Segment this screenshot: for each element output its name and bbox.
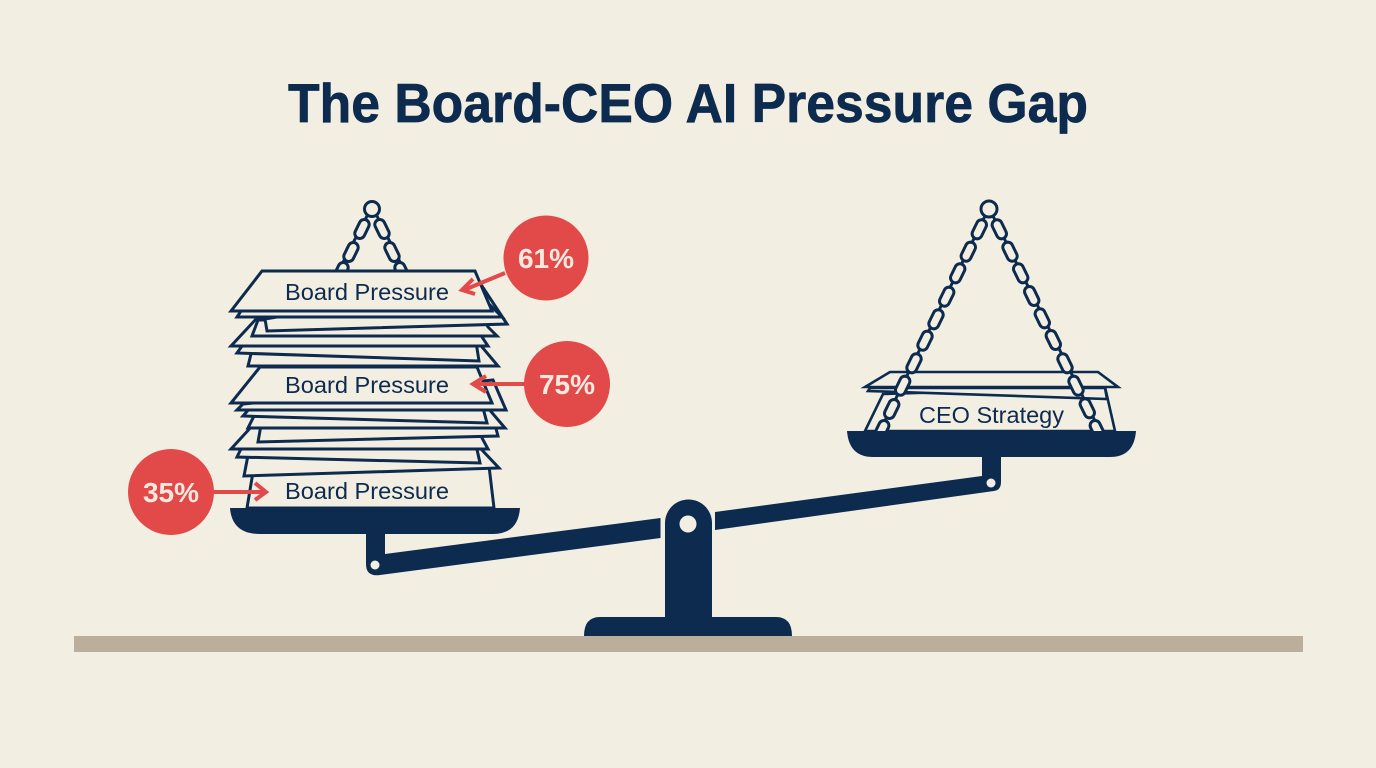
callout: 35% [128, 449, 266, 535]
callout: 75% [473, 341, 610, 427]
fulcrum stand [584, 499, 792, 636]
callout: 75%: 75% [539, 369, 595, 400]
callout: 61%: 61% [518, 243, 574, 274]
label: board pressure middle: Board Pressure [285, 372, 449, 398]
left pan chains [332, 202, 411, 283]
callout: 61% [462, 216, 588, 300]
left pan [230, 508, 520, 534]
callout: 35%: 35% [143, 477, 199, 508]
label: board pressure top: Board Pressure [285, 279, 449, 305]
right pan paper stack [865, 372, 1118, 431]
right pan [847, 431, 1136, 457]
title: The Board-CEO AI Pressure Gap [288, 72, 1088, 134]
balance beam [366, 457, 1001, 575]
left pan paper stack [231, 271, 507, 508]
label: CEO strategy: CEO Strategy [919, 402, 1065, 428]
ground line [74, 636, 1303, 652]
right pan chains [873, 201, 1106, 441]
label: board pressure bottom: Board Pressure [285, 478, 449, 504]
